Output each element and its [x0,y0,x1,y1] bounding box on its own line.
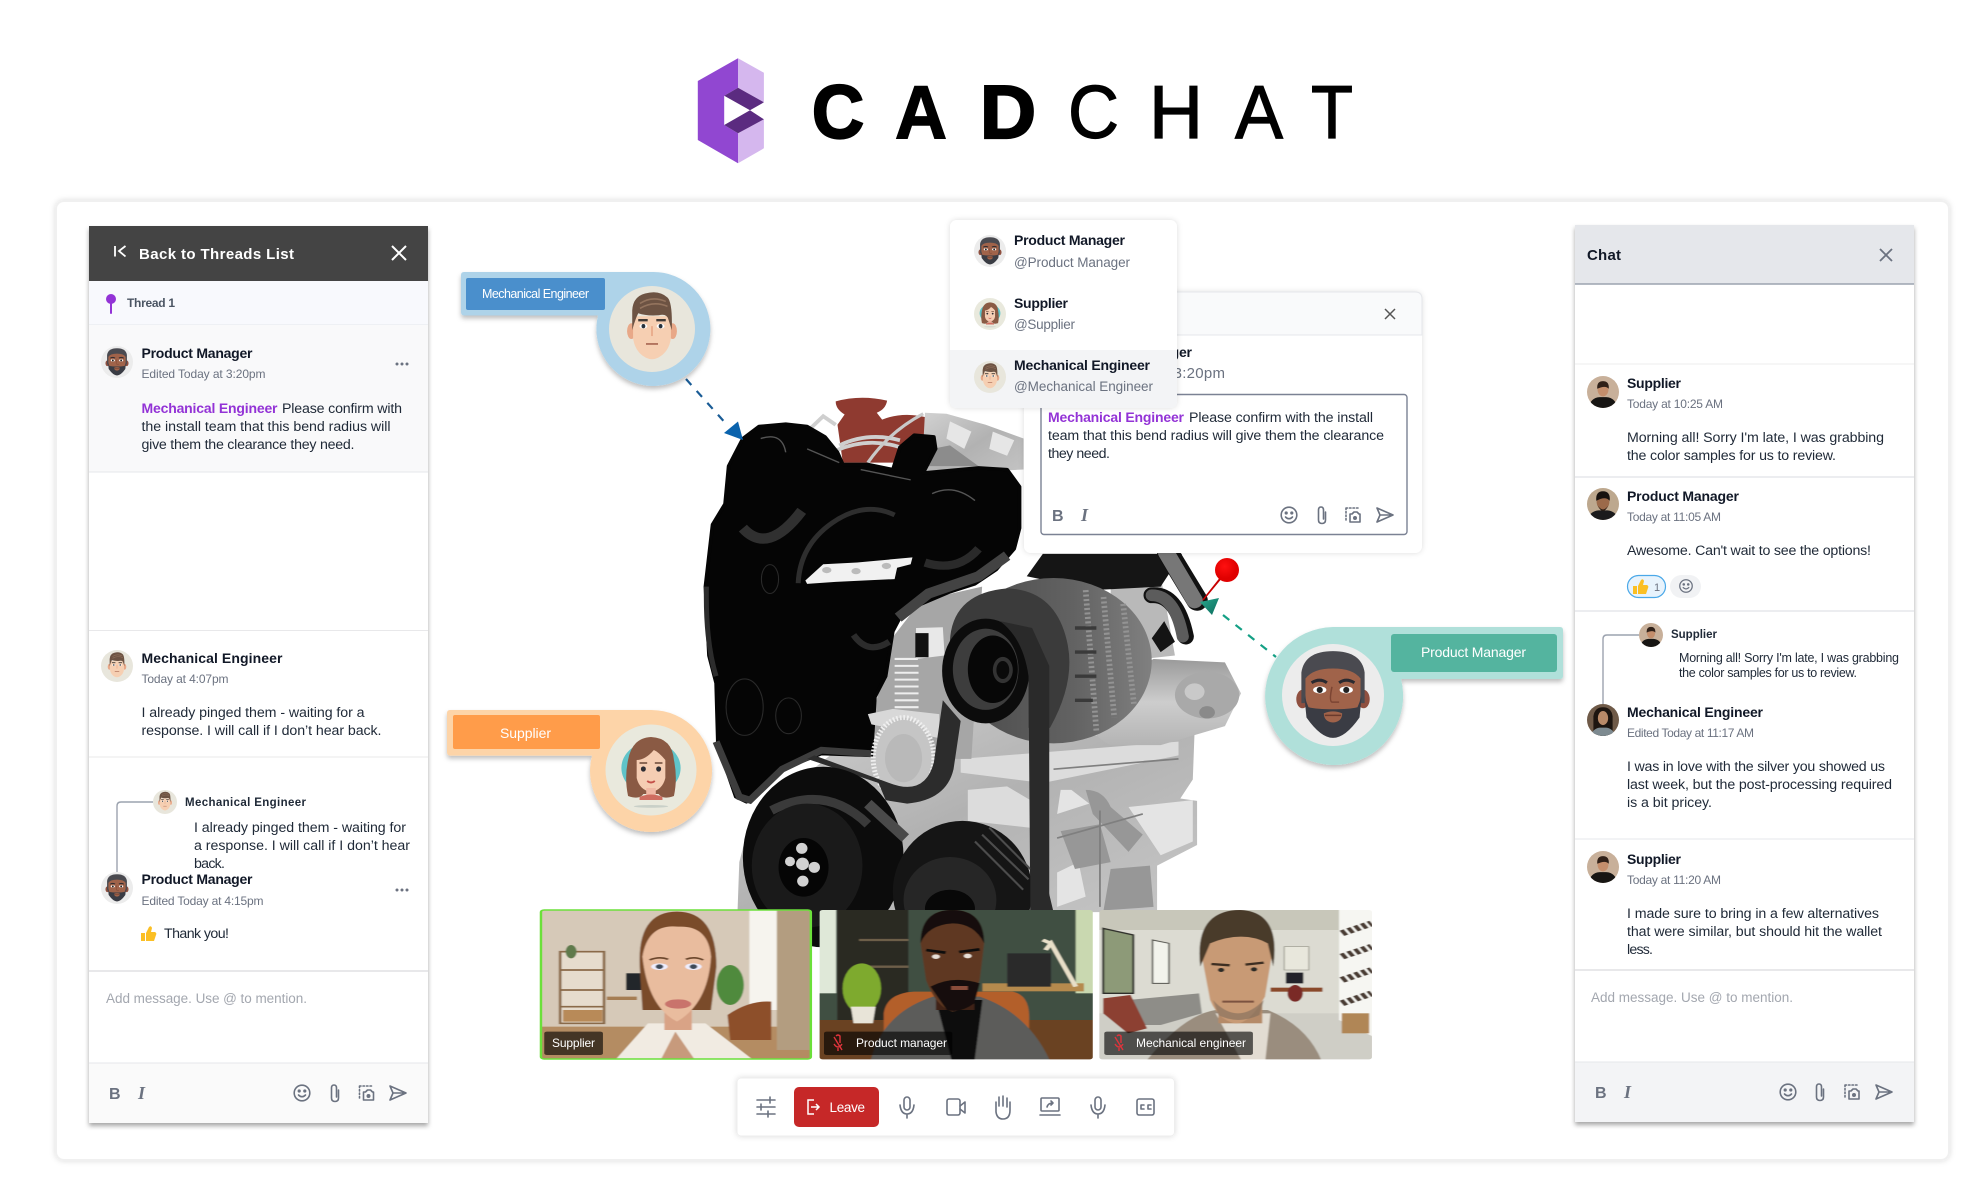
chat message 4 [1575,839,1914,958]
chat message 4: less. [1627,942,1653,958]
leave button [794,1087,879,1127]
video: supplier [542,910,810,1058]
engine: red part [836,398,929,463]
red pin marker [1203,558,1239,600]
engine: spring [895,659,919,707]
dashed arrow: mechanical engineer [686,379,743,440]
call control bar [737,1078,1174,1136]
thread toolbar: B [109,1086,121,1103]
option: product manager: @Product Manager [1014,255,1130,270]
option: mechanical engineer: @Mechanical Engineer [1014,379,1154,394]
logo wordmark: C [1068,70,1119,154]
engine: alternator [950,578,1152,743]
comment card [1024,292,1422,553]
comment text box [1041,394,1407,534]
thread message 3 with reply: I already pinged them - waiting for [194,820,406,836]
thread message 3 with reply: Edited Today at 4:15pm [142,894,264,908]
logo wordmark [812,70,1353,154]
engine: cover reflections [706,437,1007,800]
thread message 3 with reply: back. [194,856,225,872]
thread message 1: Mechanical Engineer [142,400,278,416]
thread message 1: Product Manager [142,345,253,361]
thread message 1: give them the clearance they need. [142,437,354,453]
chat message 4: that were similar, but should hit the wallet [1627,924,1882,940]
engine: AC pulley [893,821,1032,962]
option: product manager: Product Manager [1014,232,1126,248]
chat message 4: Supplier [1627,851,1682,867]
comment time: Edited Today at 3:20pm [1062,365,1225,382]
comment text [1048,409,1384,462]
video label: product manager [824,1032,952,1055]
video tiles [530,903,1380,1067]
avatar: mechanical engineer [609,286,695,372]
comment text: team that this bend radius will give them the clearance [1048,428,1384,444]
outer card frame [56,201,1949,1160]
logo mark [698,58,764,163]
chat toolbar: I [1623,1082,1632,1102]
mention dropdown [950,220,1177,408]
avatar: product manager [1282,644,1384,746]
green arrow head [1200,598,1219,615]
chat message 2: Product Manager [1627,488,1740,504]
engine: top dark band and hoses [1027,554,1182,590]
label: supplier [453,715,600,749]
logo wordmark: A [1235,70,1283,154]
comment text: Please confirm with the install [1189,410,1373,426]
engine: spring backing [871,587,982,759]
comment toolbar [1052,505,1393,525]
chat message 4: Today at 11:20 AM [1627,873,1721,887]
engine: silver backing behind hoses [1111,576,1175,662]
option: mechanical engineer [974,357,1154,394]
chat message 1: the color samples for us to review. [1627,448,1836,464]
video caption: product manager: Product manager [856,1036,947,1050]
thread message input: Add message. Use @ to mention. [106,991,307,1006]
logo [698,58,1353,163]
chat header [1575,225,1914,284]
engine: white bracket [805,557,912,584]
chat message 3 with reply: Edited Today at 11:17 AM [1627,726,1754,740]
thread message 1: Please confirm with [282,401,402,417]
comment text: Mechanical Engineer [1048,409,1185,425]
engine: pulley [942,619,1029,723]
logo wordmark: C [812,70,864,154]
chat message 1: Today at 10:25 AM [1627,397,1723,411]
thread header [89,226,428,281]
thread message 1 [89,325,428,472]
label: supplier: Supplier [500,725,551,741]
thread message 3 with reply [101,790,410,942]
panel: thread [89,226,428,1123]
thread message 2: response. I will call if I don’t hear back. [142,723,382,739]
thread label row [89,281,428,325]
video label: mechanical engineer [1104,1032,1253,1055]
thread message 1: the install team that this bend radius will [142,419,390,435]
thread message 2: Today at 4:07pm [142,672,228,686]
engine: crank pulley [743,767,904,947]
logo wordmark: A [895,70,947,154]
avatar: supplier [606,724,696,816]
logo wordmark: T [1311,70,1353,154]
option: product manager [974,232,1130,270]
video: product manager [820,910,1093,1060]
comment text: they need. [1048,446,1110,462]
chat message 3 with reply: Mechanical Engineer [1627,704,1764,720]
leave button: Leave [830,1100,865,1115]
chat message 3 with reply: is a bit pricey. [1627,795,1712,811]
thread toolbar [89,1063,428,1123]
video: mechanical engineer [1099,910,1372,1060]
label: product manager: Product Manager [1421,644,1526,660]
reactions [1628,575,1701,598]
thread message 2: Mechanical Engineer [142,650,283,666]
chat message 2: Today at 11:05 AM [1627,510,1721,524]
thread message 1: Edited Today at 3:20pm [142,367,266,381]
engine: black cover [705,424,1020,802]
close icon [1385,309,1395,319]
panel: chat [1575,225,1914,1122]
chat message 3 with reply: Morning all! Sorry I'm late, I was grabbing [1679,651,1899,665]
video caption: mechanical engineer: Mechanical engineer [1136,1036,1246,1050]
label: product manager [1391,634,1557,672]
icon: raise hand [996,1096,1010,1119]
video caption: supplier: Supplier [552,1036,595,1050]
icon: microphone [900,1097,914,1118]
option: mechanical engineer: Mechanical Engineer [1014,357,1151,373]
engine: silver top block [921,413,1024,480]
engine: starter motor [1089,659,1241,745]
option: supplier [974,295,1076,332]
comment toolbar: I [1080,505,1089,525]
highlighted row [950,350,1177,408]
thread toolbar: I [137,1083,146,1103]
chat toolbar [1575,1062,1914,1122]
callout: mechanical engineer [461,272,710,386]
comment card header [1024,292,1422,335]
icon: share screen [1040,1098,1060,1115]
chat message 3 with reply: the color samples for us to review. [1679,666,1857,680]
chat message 4: I made sure to bring in a few alternatives [1627,906,1879,922]
callout: product manager [1265,627,1563,765]
thread message 2: I already pinged them - waiting for a [142,705,365,721]
logo wordmark: D [980,70,1036,154]
chat message 2: Awesome. Can't wait to see the options! [1627,543,1871,559]
chat message 1: Supplier [1627,375,1682,391]
thread message 3 with reply: Thank you! [164,926,229,942]
thread header: Back to Threads List [139,246,294,263]
thread message 2 [89,630,428,757]
chat message 3 with reply: last week, but the post-processing required [1627,777,1892,793]
comment toolbar: B [1052,508,1064,525]
label: mechanical engineer [466,278,605,310]
chat header: Chat [1587,247,1621,264]
chat message 1: Morning all! Sorry I'm late, I was grabbing [1627,430,1884,446]
reactions: 1 [1654,582,1660,594]
dashed arrow: product manager [1223,615,1276,657]
video label: supplier [544,1032,603,1055]
icon: settings sliders [757,1097,775,1117]
chat message 2 [1575,477,1914,559]
label: mechanical engineer: Mechanical Engineer [482,287,589,301]
video frame highlight [541,910,811,1059]
icon: microphone two [1091,1097,1105,1118]
chat message 3 with reply: Supplier [1671,629,1718,641]
engine: lower belt [807,700,961,804]
engine: vertical belt [1000,621,1049,912]
option: supplier: Supplier [1014,295,1069,311]
icon: closed captions [1137,1099,1154,1115]
chat message 3 with reply: I was in love with the silver you showed us [1627,759,1885,775]
icon: video camera [947,1099,965,1115]
chat message 3 with reply [1575,611,1914,811]
engine: silver tensioner [868,709,939,738]
logo wordmark: H [1149,70,1203,154]
chat message input: Add message. Use @ to mention. [1591,990,1793,1005]
thread message 3 with reply: Product Manager [142,871,253,887]
comment author: Product Manager [1081,344,1193,360]
chat message 1 [1575,364,1914,464]
thread message 3 with reply: Mechanical Engineer [185,797,307,809]
callout: supplier [447,710,712,832]
thread label row: Thread 1 [127,296,175,310]
thread message 3 with reply: a response. I will call if I don’t hear [194,838,410,854]
option: supplier: @Supplier [1014,317,1076,332]
chat toolbar: B [1595,1085,1607,1102]
3D engine model [705,398,1241,962]
engine: silver lower body [737,707,1197,912]
